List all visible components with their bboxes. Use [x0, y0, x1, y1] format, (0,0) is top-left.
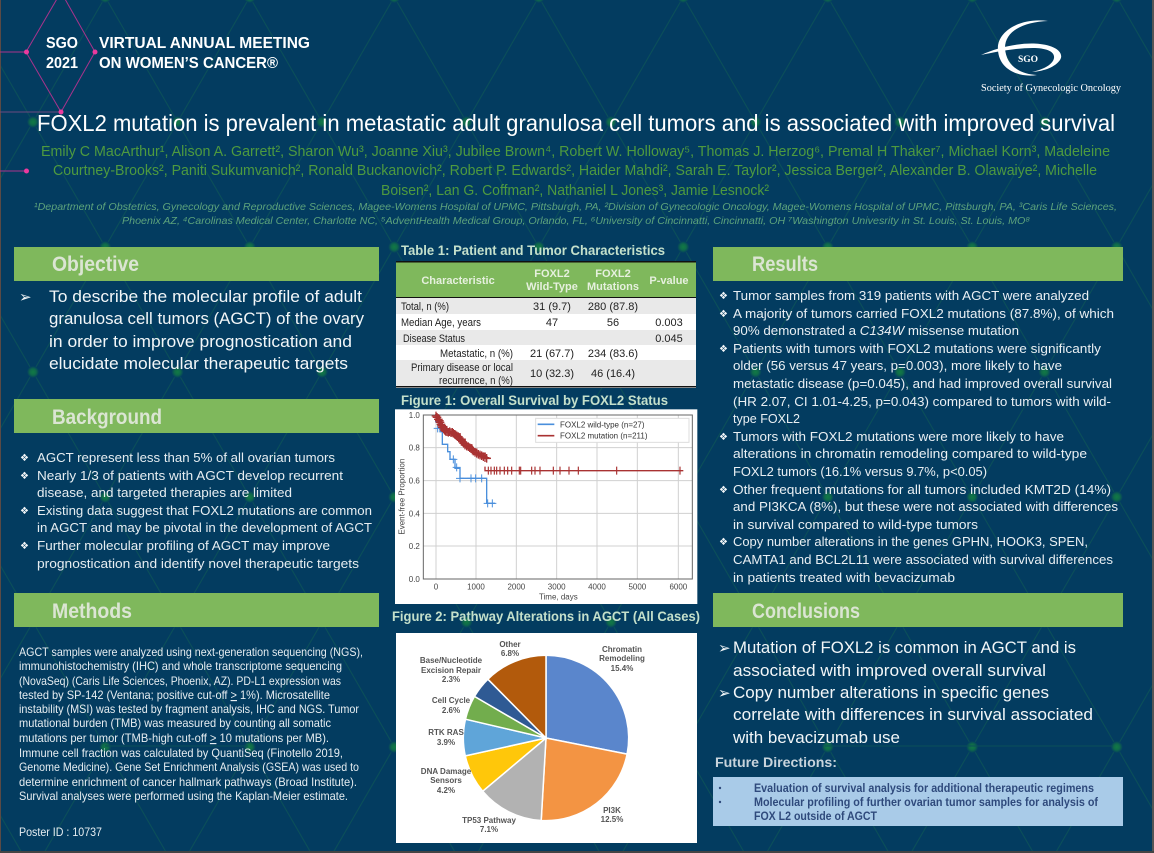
- future directions heading: Future Directions:: [715, 754, 837, 770]
- chart: Kaplan-Meier overall survival: Time, days: [539, 592, 578, 601]
- table: patient and tumor characteristics: 56: [607, 317, 619, 329]
- chart: pathway alterations pie: Sensors: [430, 776, 462, 785]
- panel: conclusions: ➢: [718, 684, 731, 702]
- panel: results: Copy number alterations in the genes GPHN, HOOK3, SPEN,: [733, 534, 1088, 549]
- panel: objective: [14, 247, 379, 373]
- panel: methods: [14, 593, 379, 839]
- table: patient and tumor characteristics: 47: [546, 317, 558, 329]
- panel: methods: mutations per tumor (TMB-high cut-off > 10 mutations per MB).: [19, 732, 329, 745]
- panel: results: CAMTA1 and BCL2L11 were associated with survival differences: [733, 552, 1113, 567]
- panel: methods: AGCT samples were analyzed using next-generation sequencing (NGS),: [19, 646, 363, 659]
- panel: methods: (NovaSeq) (Caris Life Sciences, Phoenix, AZ). PD-L1 expression was: [19, 675, 341, 688]
- panel: results: older (56 versus 47 years, p=0.003), more likely to have: [733, 358, 1062, 373]
- panel: objective: ➢: [19, 288, 32, 306]
- panel: results: in survival compared to wild-type tumors: [733, 517, 979, 532]
- chart: Kaplan-Meier overall survival: 3000: [548, 582, 566, 591]
- panel: methods: immunohistochemistry (IHC) and whole transcriptome sequencing: [19, 660, 342, 673]
- panel: methods: determine enrichment of cancer hallmark pathways (Broad Institute).: [19, 776, 357, 789]
- panel: conclusions: Copy number alterations in specific genes: [733, 683, 1049, 702]
- chart: pathway alterations pie: Base/Nucleotide: [420, 656, 483, 665]
- panel: results: ❖: [719, 537, 728, 548]
- chart: pathway alterations pie: 4.2%: [437, 786, 455, 795]
- chart: pathway alterations pie: DNA Damage: [421, 767, 472, 776]
- heading: objective: Objective: [52, 253, 139, 276]
- heading: conclusions: Conclusions: [752, 600, 860, 623]
- panel: results: alterations in chromatin remodeling compared to wild-type: [733, 446, 1087, 461]
- table: patient and tumor characteristics: Median Age, years: [401, 317, 481, 329]
- panel: results: ❖: [719, 432, 728, 443]
- table: patient and tumor characteristics: 0.045: [655, 333, 683, 345]
- panel: conclusions: Mutation of FOXL2 is common in AGCT and is: [733, 638, 1076, 657]
- icon: Society of Gynecologic Oncology logo: Society of Gynecologic Oncology: [981, 82, 1121, 94]
- heading: methods: Methods: [52, 600, 132, 623]
- heading: methods: [14, 593, 379, 627]
- panel: results: Patients with tumors with FOXL2 mutations were significantly: [733, 341, 1102, 356]
- panel: results: (HR 2.07, CI 1.01-4.25, p=0.043) compared to tumors with wild-: [733, 394, 1111, 409]
- chart: pathway alterations pie: TP53 Pathway: [462, 816, 516, 825]
- chart: pathway alterations pie: Remodeling: [599, 654, 645, 663]
- chart: Kaplan-Meier overall survival: 0: [434, 582, 439, 591]
- authors: Emily C MacArthur¹, Alison A. Garrett², Sharon Wu³, Joanne Xiu³, Jubilee Brown⁴, Robert W. Holloway⁵, Thomas J. Herzog⁶, Premal H Thaker⁷, Michael Korn³, Madeleine: [41, 143, 1110, 160]
- table: patient and tumor characteristics: 31 (9.7): [533, 301, 571, 313]
- icon: Society of Gynecologic Oncology logo: SGO: [1018, 55, 1038, 65]
- authors: Courtney-Brooks², Paniti Sukumvanich², Ronald Buckanovich², Robert P. Edwards², Haider Mahdi², Sarah E. Taylor², Jessica Berger², Alexander B. Olawaiye², Michelle: [53, 162, 1097, 179]
- poster id: Poster ID : 10737: [19, 826, 102, 839]
- table: patient and tumor characteristics: 280 (87.8): [588, 301, 638, 313]
- title: FOXL2 mutation is prevalent in metastatic adult granulosa cell tumors and is associated with improved survival: [37, 110, 1115, 136]
- figure 1 heading: Figure 1: Overall Survival by FOXL2 Status: [401, 392, 668, 408]
- panel: conclusions: [713, 593, 1123, 747]
- panel: results: ❖: [719, 344, 728, 355]
- panel: background: Further molecular profiling of AGCT may improve: [37, 538, 330, 553]
- table: patient and tumor characteristics: Metastatic, n (%): [440, 348, 513, 360]
- panel: conclusions: with bevacizumab use: [732, 728, 900, 747]
- meeting logo text: [46, 35, 310, 72]
- meeting logo text: 2021: [46, 55, 78, 72]
- chart: pathway alterations pie: RTK RAS: [428, 728, 464, 737]
- panel: background: Existing data suggest that FOXL2 mutations are common: [37, 503, 372, 518]
- heading: background: [14, 399, 379, 433]
- panel: methods: mutational burden (TMB) was measured by counting all somatic: [19, 717, 331, 730]
- chart: pathway alterations pie: Chromatin: [602, 645, 642, 654]
- panel: conclusions: ➢: [718, 639, 731, 657]
- heading: background: Background: [52, 406, 162, 429]
- panel: objective: elucidate molecular therapeutic targets: [49, 355, 348, 373]
- panel: results: and PI3KCA (8%), but these were not associated with differences: [733, 499, 1119, 514]
- panel: results: Other frequent mutations for all tumors included KMT2D (14%): [733, 482, 1111, 497]
- chart: pathway alterations pie: Excision Repair: [421, 666, 481, 675]
- panel: results: FOXL2 tumors (16.1% versus 9.7%, p<0.05): [733, 464, 987, 479]
- panel: conclusions: correlate with differences in survival associated: [733, 705, 1093, 724]
- panel: background: in AGCT and may be pivotal in the development of AGCT: [37, 520, 372, 535]
- table: patient and tumor characteristics: [396, 261, 696, 388]
- chart: pathway alterations pie: 12.5%: [601, 815, 623, 824]
- table: patient and tumor characteristics: Primary disease or local: [411, 362, 513, 374]
- table: patient and tumor characteristics: 234 (83.6): [588, 348, 638, 360]
- chart: Kaplan-Meier overall survival: [395, 409, 697, 604]
- chart: Kaplan-Meier overall survival: 2000: [507, 582, 526, 591]
- panel: background: ❖: [20, 541, 29, 552]
- panel: objective: granulosa cell tumors (AGCT) of the ovary: [49, 310, 365, 328]
- authors: [41, 143, 1110, 199]
- table: patient and tumor characteristics: Wild-Type: [526, 281, 578, 293]
- icon: Society of Gynecologic Oncology logo: [981, 20, 1121, 94]
- callout: future directions: Evaluation of survival analysis for additional therapeutic regimens: [754, 783, 1094, 795]
- chart: Kaplan-Meier overall survival: FOXL2 mutation (n=211): [560, 432, 648, 441]
- chart: Kaplan-Meier overall survival: 0.2: [409, 542, 420, 551]
- table: patient and tumor characteristics: 46 (16.4): [591, 368, 635, 380]
- panel: results: [713, 247, 1123, 585]
- affiliations: Phoenix AZ, ⁴Carolinas Medical Center, Charlotte NC, ⁵AdventHealth Medical Group, Orlando, FL, ⁶University of Cincinnatti, Cincinnatti, OH ⁷Washington Univesrity in St. Louis, St. Louis, MO⁸: [122, 215, 1030, 227]
- chart: Kaplan-Meier overall survival: 1000: [467, 582, 485, 591]
- panel: methods: Immune cell fraction was calculated by QuantiSeq (Finotello 2019,: [19, 747, 343, 760]
- table heading: Table 1: Patient and Tumor Characteristics: [401, 242, 665, 258]
- figure 2 heading: Figure 2: Pathway Alterations in AGCT (All Cases): [392, 608, 700, 624]
- table: patient and tumor characteristics: Characteristic: [421, 275, 495, 287]
- table: patient and tumor characteristics: Disease Status: [403, 333, 465, 345]
- chart: Kaplan-Meier overall survival: 4000: [588, 582, 606, 591]
- panel: results: Tumors with FOXL2 mutations were more likely to have: [733, 429, 1064, 444]
- affiliations: ¹Department of Obstetrics, Gynecology and Reproductive Sciences, Magee-Womens Hospital of UPMC, Pittsburgh, PA, ²Division of Gynecologic Oncology, Magee-Womens Hospital of UPMC, Pittsburgh, PA, ³Caris Life Sciences,: [34, 201, 1117, 213]
- table: patient and tumor characteristics: P-value: [649, 275, 689, 287]
- panel: background: ❖: [20, 471, 29, 482]
- callout: future directions: Molecular profiling of further ovarian tumor samples for analysis of: [754, 797, 1098, 809]
- panel: background: disease, and targeted therapies are limited: [37, 485, 292, 500]
- heading: results: [713, 247, 1123, 281]
- table: patient and tumor characteristics: recurrence, n (%): [439, 375, 513, 387]
- heading: conclusions: [713, 593, 1123, 627]
- panel: methods: tested by SP-142 (Ventana; positive cut-off > 1%). Microsatellite: [19, 689, 330, 702]
- panel: background: prognostication and identify novel therapeutic targets: [37, 556, 360, 571]
- panel: background: Nearly 1/3 of patients with AGCT develop recurrent: [37, 468, 343, 483]
- chart: Kaplan-Meier overall survival: 5000: [628, 582, 647, 591]
- panel: methods: Genome Medicine). Gene Set Enrichment Analysis (GSEA) was used to: [19, 761, 359, 774]
- chart: Kaplan-Meier overall survival: FOXL2 wild-type (n=27): [560, 421, 645, 430]
- panel: results: ❖: [719, 291, 728, 302]
- callout: future directions: FOX L2 outside of AGCT: [754, 811, 877, 823]
- panel: methods: instability (MSI) was tested by fragment analysis, IHC and NGS. Tumor: [19, 703, 359, 716]
- panel: results: ❖: [719, 309, 728, 320]
- panel: background: ❖: [20, 506, 29, 517]
- panel: objective: in order to improve prognostication and: [49, 333, 352, 351]
- meeting logo text: VIRTUAL ANNUAL MEETING: [99, 35, 310, 52]
- chart: pathway alterations pie: 2.3%: [442, 675, 460, 684]
- chart: pathway alterations pie: 2.6%: [442, 706, 460, 715]
- table: patient and tumor characteristics: FOXL2: [534, 268, 570, 280]
- panel: results: Tumor samples from 319 patients with AGCT were analyzed: [733, 288, 1089, 303]
- chart: pathway alterations pie: PI3K: [603, 806, 621, 815]
- heading: objective: [14, 247, 379, 281]
- panel: background: ❖: [20, 453, 29, 464]
- panel: results: A majority of tumors carried FOXL2 mutations (87.8%), of which: [733, 306, 1114, 321]
- chart: pathway alterations pie: [396, 633, 697, 843]
- panel: background: AGCT represent less than 5% of all ovarian tumors: [37, 450, 335, 465]
- icon: magenta hexagon network: [0, 0, 98, 174]
- chart: Kaplan-Meier overall survival: 6000: [669, 582, 688, 591]
- callout: future directions: [713, 777, 1123, 826]
- panel: results: type FOXL2: [733, 411, 800, 426]
- table: patient and tumor characteristics: 10 (32.3): [530, 368, 574, 380]
- panel: methods: Survival analyses were performed using the Kaplan-Meier estimate.: [19, 790, 348, 803]
- chart: pathway alterations pie: 3.9%: [437, 738, 455, 747]
- chart: pathway alterations pie: Other: [499, 640, 521, 649]
- table: patient and tumor characteristics: 0.003: [655, 317, 683, 329]
- chart: Kaplan-Meier overall survival: 0.6: [409, 477, 420, 486]
- table: patient and tumor characteristics: Mutations: [587, 281, 639, 293]
- meeting logo text: ON WOMEN’S CANCER®: [99, 55, 278, 72]
- chart: Kaplan-Meier overall survival: 0.4: [409, 509, 420, 518]
- table: patient and tumor characteristics: FOXL2: [595, 268, 631, 280]
- panel: results: ❖: [719, 485, 728, 496]
- panel: results: in patients treated with bevacizumab: [733, 570, 955, 585]
- chart: Kaplan-Meier overall survival: 0.8: [409, 444, 420, 453]
- panel: conclusions: associated with improved overall survival: [733, 661, 1046, 680]
- affiliations: [34, 201, 1117, 227]
- chart: pathway alterations pie: 7.1%: [480, 825, 498, 834]
- meeting logo text: SGO: [46, 35, 78, 52]
- chart: Kaplan-Meier overall survival: Event-free Proportion: [397, 459, 406, 535]
- chart: Kaplan-Meier overall survival: 0.0: [409, 575, 420, 584]
- authors: Boisen², Lan G. Coffman², Nathaniel L Jones³, Jamie Lesnock²: [381, 182, 769, 199]
- chart: pathway alterations pie: 15.4%: [611, 664, 633, 673]
- heading: results: Results: [752, 253, 818, 276]
- table: patient and tumor characteristics: 21 (67.7): [530, 348, 574, 360]
- chart: Kaplan-Meier overall survival: 1.0: [409, 411, 420, 420]
- panel: background: [14, 399, 379, 571]
- panel: results: 90% demonstrated a C134W missense mutation: [733, 323, 1019, 338]
- chart: pathway alterations pie: 6.8%: [501, 649, 519, 658]
- panel: results: metastatic disease (p=0.045), and had improved overall survival: [733, 376, 1112, 391]
- panel: objective: To describe the molecular profile of adult: [49, 288, 362, 306]
- table: patient and tumor characteristics: Total, n (%): [401, 301, 449, 313]
- chart: pathway alterations pie: Cell Cycle: [432, 696, 471, 705]
